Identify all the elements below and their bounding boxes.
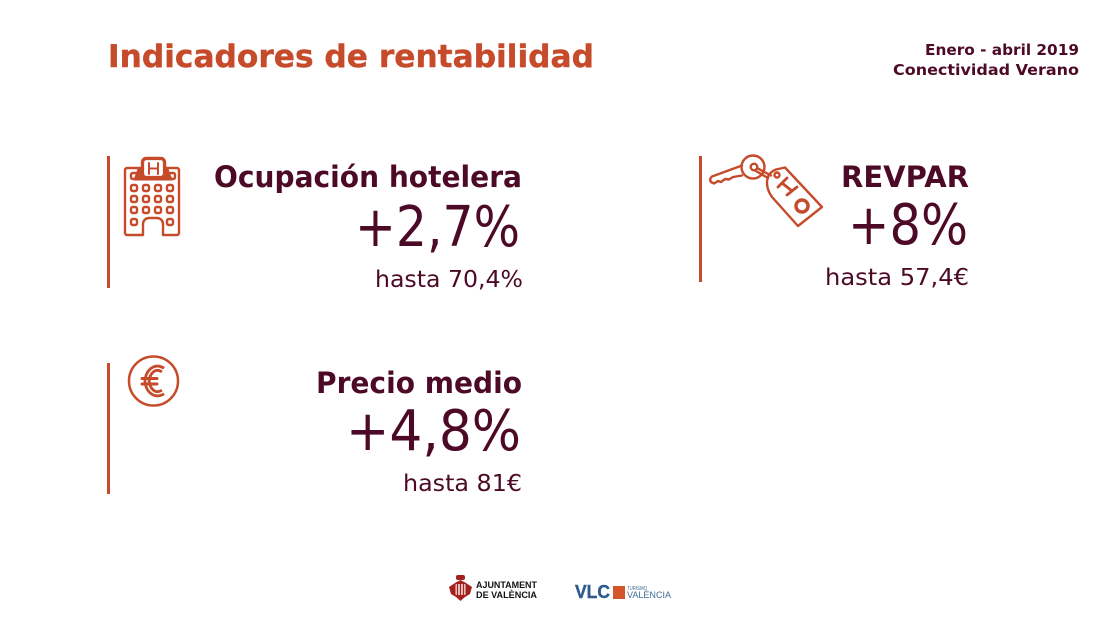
heading: ocupación hotelera: Ocupación hotelera bbox=[214, 160, 522, 194]
icon: key with hotel tag bbox=[710, 156, 822, 226]
period and scope note: Conectividad Verano bbox=[893, 61, 1079, 79]
icon: hotel building bbox=[125, 158, 179, 235]
logo: Ajuntament de València: DE VALÈNCIA bbox=[476, 590, 537, 600]
icon: city crest bbox=[449, 575, 472, 601]
heading: precio medio: Precio medio bbox=[316, 366, 522, 400]
logo: VLC Turismo València: VLC bbox=[575, 582, 610, 602]
panel: revpar bbox=[699, 156, 969, 291]
logo: Ajuntament de València: AJUNTAMENT bbox=[476, 580, 537, 590]
logo: VLC Turismo València: TURISMO bbox=[627, 586, 647, 592]
icon: euro coin bbox=[129, 356, 178, 406]
panel: precio medio bbox=[107, 356, 522, 497]
period and scope note bbox=[893, 41, 1079, 79]
value: +2,7%: +2,7% bbox=[355, 195, 520, 260]
value: +4,8%: +4,8% bbox=[346, 399, 521, 464]
heading: revpar: REVPAR bbox=[841, 160, 969, 194]
logo: VLC Turismo València: VALÈNCIA bbox=[627, 590, 672, 601]
panel: ocupación hotelera bbox=[107, 156, 523, 293]
logo: VLC Turismo València bbox=[575, 582, 672, 602]
detail: hasta 81€: hasta 81€ bbox=[403, 471, 522, 497]
title: Indicadores de rentabilidad bbox=[108, 39, 594, 75]
logo: Ajuntament de València bbox=[449, 575, 537, 601]
period and scope note: Enero - abril 2019 bbox=[925, 41, 1079, 59]
value: +8%: +8% bbox=[848, 193, 968, 258]
detail: hasta 57,4€: hasta 57,4€ bbox=[825, 265, 969, 291]
detail: hasta 70,4%: hasta 70,4% bbox=[375, 267, 523, 293]
